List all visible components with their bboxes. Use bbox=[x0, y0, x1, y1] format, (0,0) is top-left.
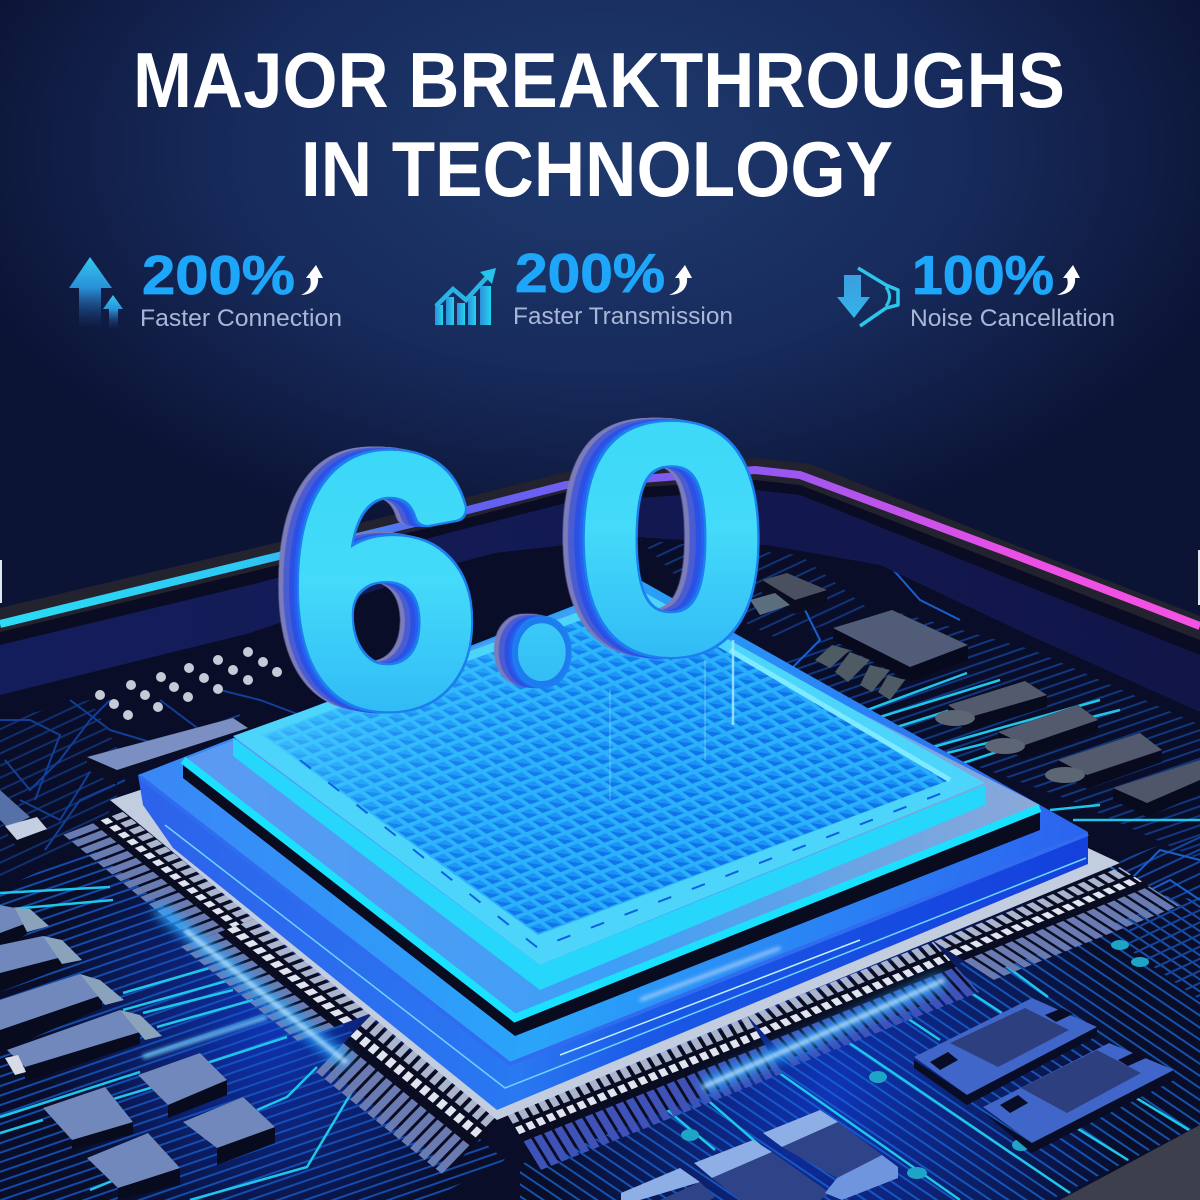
icon: speaker with down arrow bbox=[837, 268, 898, 326]
big 3D 6.0 numerals: 0 bbox=[584, 371, 758, 708]
icon: growth bar chart bbox=[435, 268, 496, 325]
dim board traces bbox=[0, 555, 1200, 900]
stat: faster connection bbox=[69, 244, 342, 332]
solder dots bbox=[95, 647, 282, 720]
resistor bars right bbox=[935, 681, 1200, 817]
traces right bbox=[659, 673, 1200, 1200]
stat: noise cancellation: Noise Cancellation bbox=[910, 305, 1115, 332]
stat: faster transmission bbox=[435, 242, 733, 330]
icon: double up arrows bbox=[69, 257, 123, 328]
glass base layer bbox=[138, 580, 1088, 1110]
title bbox=[133, 36, 1065, 213]
glowing cell grid bbox=[262, 600, 950, 948]
trace fields bbox=[0, 540, 1200, 1200]
stat: faster connection: 200% bbox=[142, 244, 295, 306]
title: MAJOR BREAKTHROUGHS bbox=[133, 36, 1065, 124]
big 3D 6.0 numerals: 6 bbox=[293, 392, 475, 769]
big 3D 6.0 numerals: . bbox=[505, 359, 579, 753]
device corner bottom right bbox=[1060, 1125, 1200, 1200]
substrate plate bbox=[110, 790, 1120, 1120]
board glow bbox=[54, 844, 1112, 1200]
small IC left bbox=[87, 718, 248, 785]
chip pins left row bbox=[78, 814, 494, 1161]
resistors left bbox=[0, 905, 162, 1082]
icon: white swoosh arrow bbox=[301, 265, 323, 295]
stat: faster transmission: 200% bbox=[515, 242, 665, 304]
title: IN TECHNOLOGY bbox=[301, 125, 893, 213]
icon: white swoosh arrow bbox=[669, 265, 692, 295]
light beams from chip bbox=[610, 640, 733, 800]
big 3D 6.0 numerals bbox=[293, 359, 758, 769]
circuit board bbox=[0, 537, 1200, 1200]
IC chips upper right bbox=[750, 573, 968, 700]
bottom streak highlights bbox=[560, 940, 860, 1055]
stat: noise cancellation bbox=[837, 244, 1115, 332]
middle plate bbox=[183, 590, 1040, 1036]
board pads bbox=[681, 940, 1149, 1179]
chip pins right row bbox=[510, 871, 1164, 1156]
top plate with cyan edge bbox=[233, 590, 985, 990]
icon: white swoosh arrow bbox=[1057, 265, 1080, 295]
edge highlights bbox=[0, 550, 1200, 605]
glow lines along pins bbox=[143, 907, 944, 1087]
surface mount capacitors bottom bbox=[621, 1110, 898, 1200]
small block left edge bbox=[0, 790, 50, 852]
cyan traces left bbox=[0, 887, 363, 1200]
surface mount chips right bbox=[914, 998, 1174, 1153]
square capacitors left bbox=[43, 1053, 275, 1200]
stat: noise cancellation: 100% bbox=[912, 244, 1054, 306]
stat: faster connection: Faster Connection bbox=[140, 305, 342, 332]
device rim with LED light strip bbox=[0, 458, 1200, 760]
stat: faster transmission: Faster Transmission bbox=[513, 303, 733, 330]
background sky gradient bbox=[0, 0, 1200, 700]
